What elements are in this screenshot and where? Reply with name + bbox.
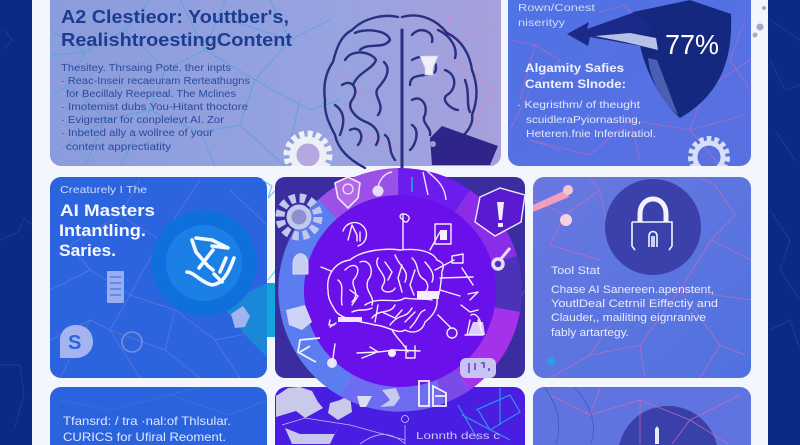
thin arcs (545, 388, 593, 444)
lilac blobs (276, 387, 352, 420)
panel: bottom right (533, 387, 751, 445)
icon: label tag (460, 358, 496, 378)
icon: chain circle (151, 210, 257, 316)
icon: document list (107, 271, 124, 303)
right face marks (461, 268, 478, 312)
text block: tool stat (551, 265, 718, 339)
text block: top left bullets (61, 63, 250, 153)
brain: top outline (324, 15, 476, 168)
blue accent lines (495, 280, 525, 320)
brain folds lower (352, 298, 432, 328)
icon: key bow (493, 259, 503, 269)
brain centre line (400, 30, 404, 168)
badge body (60, 325, 93, 358)
pink network lines (335, 10, 495, 150)
panel: top right (508, 0, 751, 175)
left hemisphere folds (335, 30, 395, 160)
hexagon outline (475, 188, 525, 236)
heading line one: Algamity Safies (525, 61, 624, 75)
tag marks (469, 363, 489, 373)
ring segment: top left (319, 168, 400, 290)
icon: upper connectors (378, 171, 446, 200)
panel: top left (50, 0, 501, 176)
cyan network (458, 388, 520, 440)
label line two: niserityy (518, 18, 565, 29)
ring segment: upper right (400, 190, 517, 290)
panel fill (533, 177, 751, 378)
node fill on nerve branch (388, 349, 396, 357)
gear node (447, 328, 457, 338)
icon: small node (327, 358, 337, 368)
heading: algamity (525, 61, 626, 91)
label line one: Rown/Conest (518, 3, 595, 14)
line one: · Kegristhm/ of theught (517, 99, 640, 111)
line four: fably artartegy. (551, 327, 629, 339)
line four: · Imotemist dubs You-Hitant thoctore (61, 102, 249, 113)
text block: top right bullets (517, 99, 656, 140)
shield facet (648, 58, 678, 115)
line three: Clauder,, mailiting eignranive (551, 312, 706, 324)
central circle diagram (278, 168, 522, 412)
line six: · Inbeted ally a wollree of your (61, 128, 214, 139)
line three: Heteren.fnie Inferdiratiol. (526, 128, 656, 140)
teal corner shape (222, 283, 267, 357)
ring segment: left (278, 199, 400, 396)
lock keyhole (649, 232, 657, 247)
white gear teeth (287, 134, 329, 176)
small node (402, 416, 408, 422)
ring segment: bottom right (400, 290, 470, 403)
arrow head (567, 12, 652, 46)
brain outer contour (324, 15, 476, 168)
line seven: content apprectiatity (66, 142, 171, 153)
icon: blue pin (411, 177, 413, 192)
shield body (633, 0, 731, 118)
line five: · Evigrertar for conplelevt AI. Zor (61, 115, 225, 126)
panel: middle left (50, 177, 267, 378)
panel fill (533, 387, 751, 445)
upper circle icon (343, 223, 366, 246)
icon: bar chart outline (419, 381, 446, 406)
icon: lock circle (605, 179, 701, 275)
document body (107, 271, 124, 303)
central white brain (321, 214, 483, 365)
tag body (430, 126, 498, 165)
pink dot one (563, 185, 573, 195)
line two: scuidleraPyiornasting, (526, 114, 641, 126)
network lines (50, 0, 340, 166)
cyan sliver in gutter (267, 283, 276, 337)
teal dot (547, 357, 555, 365)
icon: hand (231, 306, 250, 328)
pink network lines (535, 178, 751, 378)
tag shape (460, 358, 496, 378)
document icon (435, 224, 451, 244)
shield shape (335, 177, 360, 208)
line one: Thesitey. Thrsaing Pote. ther inpts (61, 63, 231, 74)
person icon fill (468, 322, 485, 335)
ring segment: top (398, 168, 470, 290)
dot two (756, 24, 764, 30)
icon: key on ring (500, 248, 510, 260)
line one: Tfansrd: / tra ·nal:of Thlsular. (63, 414, 231, 428)
person icon (465, 314, 483, 335)
outer circle (151, 210, 257, 316)
icon: plant (380, 388, 400, 407)
lilac w icon (285, 427, 338, 444)
brain contour (328, 249, 443, 332)
panel fill (50, 0, 501, 166)
gear teeth (280, 198, 318, 236)
heading line one: AI Masters (60, 201, 155, 220)
icon: lightning line (298, 338, 320, 362)
dot one (762, 6, 766, 10)
network lines (50, 180, 267, 378)
gear hub (289, 207, 309, 227)
brain stem (392, 330, 408, 352)
icon: dark tag (430, 126, 498, 165)
icon: faint rosette (122, 332, 142, 352)
icon: funnel small (357, 396, 372, 407)
badge letter: S (68, 332, 81, 354)
folder icon (452, 254, 463, 263)
line two: YoutlDeal Cetrnil Eiffectiy and (551, 298, 718, 310)
icon: gear left (280, 198, 318, 236)
eyebrow: Creaturely I The (60, 184, 147, 196)
line three: for Becillaly Reepreal. The Mclines (66, 89, 236, 100)
icon: funnel on brain (420, 56, 438, 75)
white gear body (293, 140, 323, 170)
inner circle (166, 225, 242, 301)
panel fill (275, 387, 525, 445)
icon: alert hexagon (475, 188, 525, 236)
circle badge (619, 406, 717, 445)
lock shackle (640, 199, 666, 222)
title line two: RealishtroestingContent (61, 30, 292, 50)
tag dot (430, 141, 436, 147)
heading line two: Intantling. (59, 221, 146, 240)
stat label: Tool Stat (551, 265, 600, 277)
white network (282, 418, 405, 444)
panel fill (50, 387, 267, 445)
icon: shield smile (335, 177, 360, 208)
nerve branch icon (332, 344, 420, 365)
metric value: 77% (665, 29, 719, 60)
line two: · Reac-Inseir recaeuram Rerteathugns (61, 76, 250, 87)
lock body (632, 222, 672, 250)
panel fill (508, 0, 751, 166)
inner circle (304, 195, 496, 387)
network lines (60, 387, 267, 415)
pink bar icon (533, 190, 569, 212)
gear ring (695, 143, 723, 171)
brain base strip (338, 317, 362, 322)
title line one: A2 Clestieor: Youttber's, (61, 7, 289, 27)
icon: letter badge (286, 305, 312, 330)
pink network lines (550, 388, 740, 444)
document icon fill (440, 230, 447, 240)
icon: S badge (60, 325, 93, 358)
panel: middle center (275, 177, 525, 378)
right hemisphere folds (410, 30, 470, 150)
cyan gutter lines (262, 180, 276, 280)
exclamation mark (497, 202, 504, 227)
panel: bottom left (50, 387, 267, 445)
title (61, 7, 292, 50)
text block: top right label (518, 3, 595, 29)
icon: decorative dots (752, 6, 766, 38)
text block: AI masters (59, 184, 155, 260)
small icon (655, 426, 659, 444)
dot three (752, 32, 758, 38)
line one: Chase AI Sanereen.apenstent, (551, 284, 714, 296)
panel: bottom center (275, 387, 525, 445)
icon: shield with arrow (567, 0, 731, 118)
heading line three: Saries. (59, 241, 116, 260)
icon: node dot (372, 186, 384, 196)
text block: bottom center: Lonnth dess c (416, 430, 500, 442)
ring segment: right (400, 256, 522, 312)
pink dot two (560, 214, 572, 226)
brain white block (417, 291, 439, 299)
shield face (343, 184, 353, 194)
gear teeth (691, 139, 727, 175)
spokes (321, 215, 473, 328)
heading line two: Cantem Slnode: (525, 77, 626, 91)
circle badge (605, 179, 701, 275)
line two: CURICS for Ufiral Reoment. (63, 430, 226, 444)
panel fill (275, 177, 525, 378)
ring segment: lower right (400, 290, 520, 390)
panel: middle right (533, 177, 751, 378)
panel fill (50, 177, 267, 378)
document lines (110, 277, 121, 295)
text block: bottom left (63, 414, 231, 444)
pink network lines (510, 5, 750, 166)
brain folds upper (338, 255, 433, 305)
chain glyph (187, 238, 234, 285)
arrow trail (595, 33, 658, 50)
cloud icon (400, 214, 409, 222)
ring segment: bottom (340, 290, 445, 412)
icon: chart dome (293, 254, 308, 274)
